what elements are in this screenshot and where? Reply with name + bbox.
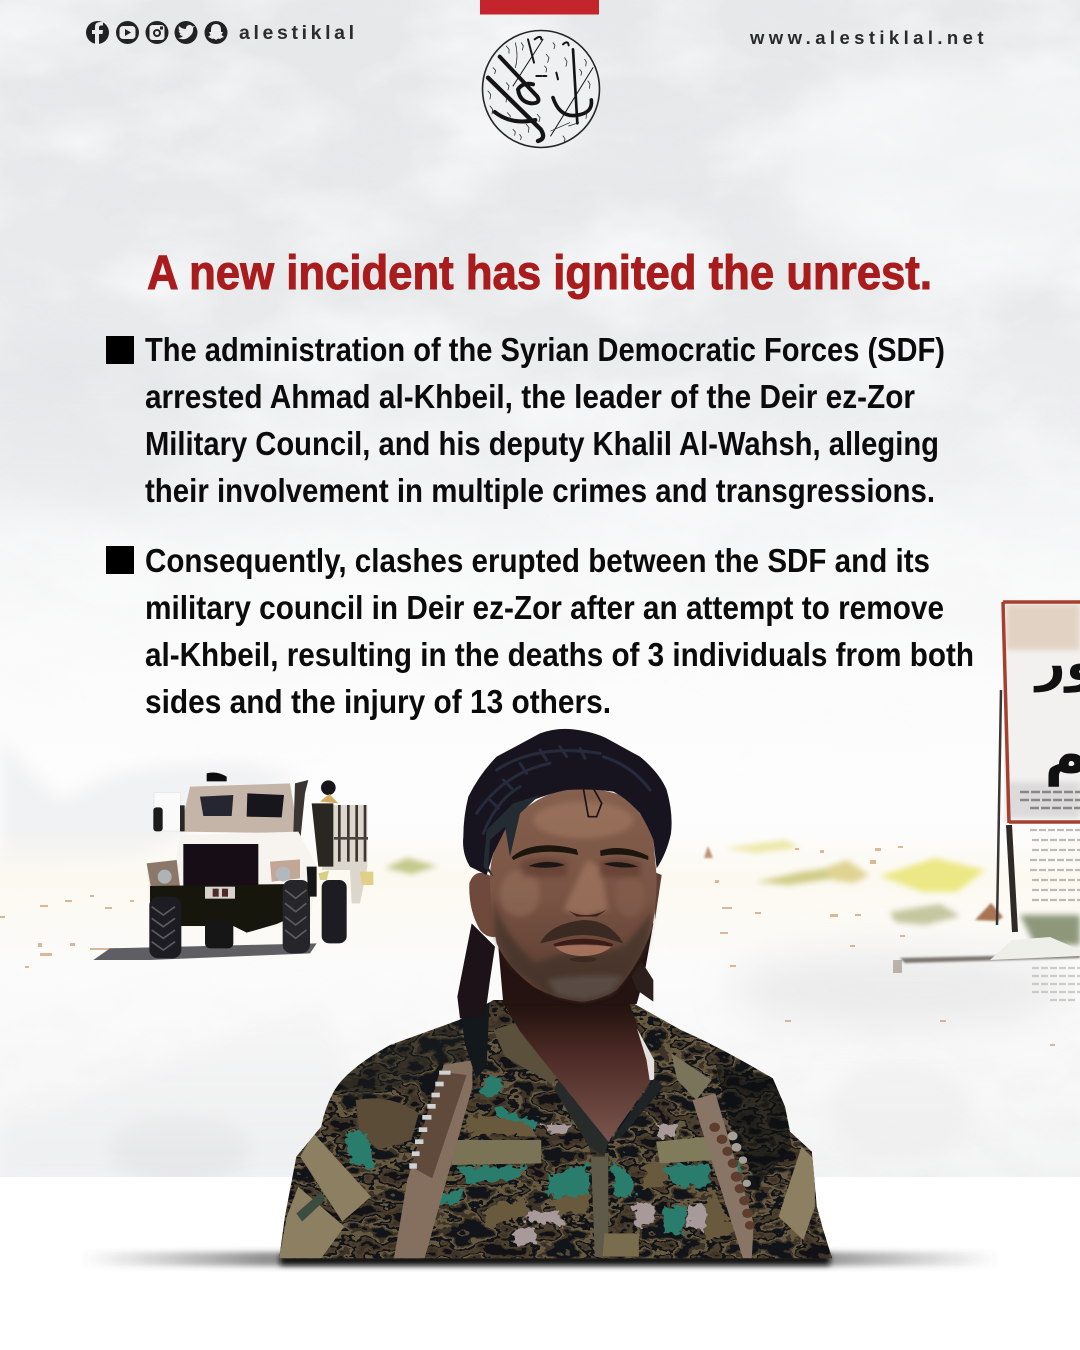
jacket (260, 1000, 860, 1260)
bullet square (106, 546, 134, 574)
title: A new incident has ignited the unrest. (147, 247, 932, 300)
background: desert ground tint (0, 862, 1080, 911)
icon: instagram (146, 21, 168, 44)
jacket brown patches (467, 1113, 735, 1240)
background: road shadow (900, 954, 1080, 963)
rear wheel (322, 880, 347, 943)
moustache (540, 920, 623, 943)
headscarf folds (477, 747, 650, 833)
person: soldier (80, 729, 1000, 1266)
truck front wheels (149, 897, 181, 958)
button placket (591, 1157, 608, 1257)
icon: snapchat (204, 21, 228, 44)
collar (493, 1020, 559, 1083)
headscarf tail (457, 923, 495, 1018)
paragraph 2: sides and the injury of 13 others. (145, 683, 611, 720)
strap right (692, 1093, 754, 1258)
collar shadow left (337, 1020, 467, 1100)
sleeve brown pad (356, 1098, 419, 1150)
face light forehead (533, 802, 633, 838)
jacket pale patches (513, 1123, 712, 1247)
neck (501, 1000, 654, 1142)
upper neck (498, 923, 653, 1004)
logo small diacritics (488, 43, 590, 142)
eye sockets (520, 857, 568, 877)
eyes (528, 862, 565, 868)
logo main strokes (488, 37, 593, 141)
paragraph 2: military council in Deir ez-Zor after an attempt to remove (145, 589, 944, 626)
paragraph 1 (145, 331, 945, 509)
nose (563, 860, 608, 917)
truck shadow (93, 943, 317, 960)
headscarf (463, 729, 672, 875)
strap left (394, 1060, 472, 1258)
background: desert shrubs (385, 840, 1080, 945)
shadow under person (80, 1252, 1000, 1266)
bullet square (106, 336, 134, 364)
face (490, 789, 657, 1002)
bullet block 2 (106, 542, 974, 720)
paragraph 1: arrested Ahmad al-Khbeil, the leader of the Deir ez-Zor (145, 378, 915, 415)
sign board (1004, 602, 1080, 823)
truck bed (322, 805, 367, 903)
sign frame (1003, 602, 1080, 823)
website url: www.alestiklal.net (749, 27, 984, 48)
paragraph 2: Consequently, clashes erupted between the SDF and its (145, 542, 930, 579)
paragraph 2: al-Khbeil, resulting in the deaths of 3 individuals from both (145, 636, 974, 673)
road sign (997, 602, 1080, 1000)
jacket tan patches (279, 1053, 815, 1258)
icon: youtube (116, 21, 139, 44)
beard shading (493, 897, 653, 1002)
mouth (553, 939, 613, 947)
paragraph 1: Military Council, and his deputy Khalil Al-Wahsh, alleging (145, 425, 939, 462)
ammo rounds right (709, 1123, 755, 1230)
background: ground specks (0, 846, 1055, 1046)
truck hood and grille (147, 832, 317, 927)
icon: facebook (86, 21, 109, 44)
social icons (86, 21, 228, 44)
background: rock and marker (704, 846, 1003, 921)
hair tail (462, 1002, 490, 1078)
icon: twitter (174, 21, 198, 44)
paragraph 2 (145, 542, 974, 720)
ear (469, 873, 497, 937)
chest tape right (656, 1137, 713, 1163)
paragraph 1: their involvement in multiple crimes and transgressions. (145, 472, 935, 509)
red top bar (480, 0, 599, 14)
background: distant hills (4, 756, 278, 844)
chin beard (547, 976, 623, 1000)
hair strands (483, 795, 540, 877)
shoulder right dark (715, 1063, 792, 1187)
head (457, 729, 672, 1018)
bullet block 1 (106, 331, 945, 509)
truck cabin (180, 783, 298, 833)
small print below sign (1030, 830, 1080, 1000)
sign posts (1009, 825, 1015, 932)
eyebrows (512, 845, 578, 860)
chest tape left (451, 1140, 541, 1165)
ammo pouch left (411, 1072, 467, 1178)
truck (93, 773, 373, 960)
jacket teal patches (344, 1077, 738, 1233)
truck bumper and axle (150, 884, 293, 933)
handle text: alestiklal (239, 22, 354, 44)
paragraph 1: The administration of the Syrian Democratic Forces (SDF) (145, 331, 945, 368)
logo: calligraphic roundel (482, 30, 600, 148)
